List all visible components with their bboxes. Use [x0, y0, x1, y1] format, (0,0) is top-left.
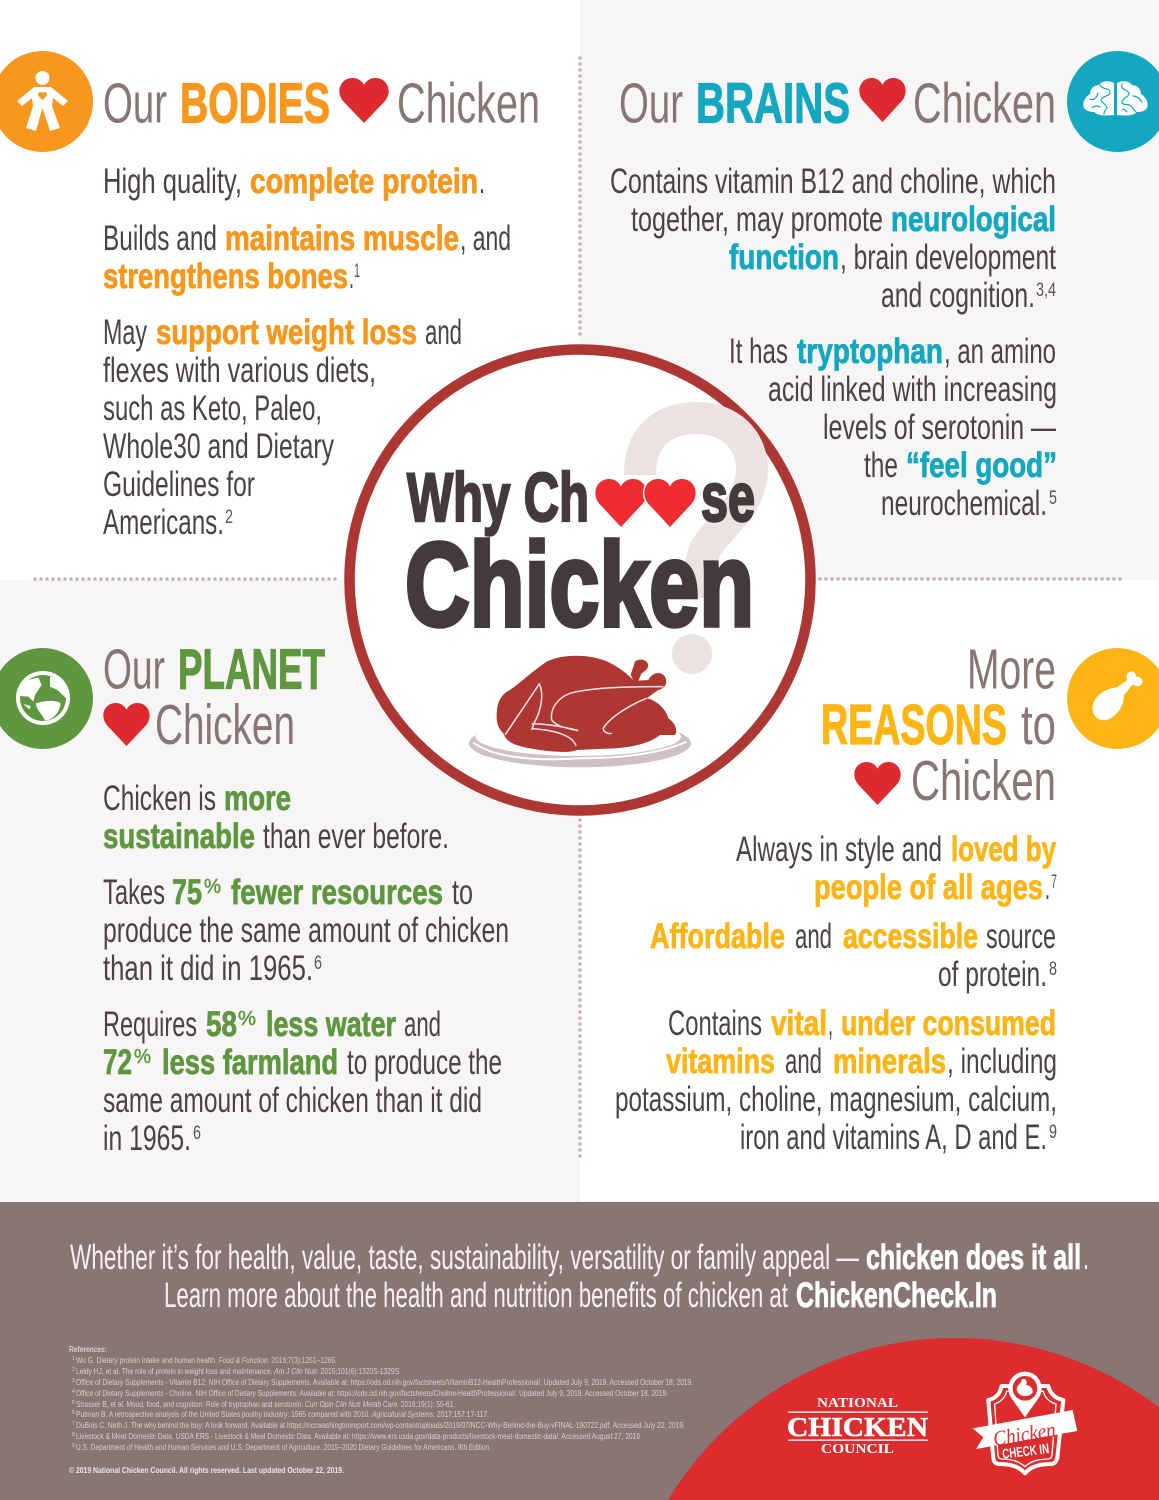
references: Livestock & Meat Domestic Data. USDA ERS - Livestock & Meat Domestic Data. Available at: https://www.ers.usda.gov/data-products/livestock-meat-domestic-data/. Accessed August 27, 2019	[76, 1432, 640, 1441]
text block: more reasons: accessible	[843, 917, 978, 956]
logo: national chicken council: NATIONAL	[817, 1396, 898, 1411]
text block: planet benefits: less water	[266, 1005, 396, 1044]
closing message: chicken does it all	[866, 1238, 1081, 1277]
copyright: © 2019 National Chicken Council. All rights reserved. Last updated October 22, 2019.	[69, 1466, 344, 1475]
heading: our planet loves chicken: Chicken	[155, 693, 295, 757]
text block: planet benefits: than ever before.	[263, 817, 449, 856]
text block: planet benefits: Requires	[103, 1005, 197, 1044]
references: Putman B. A retrospective analysis of the United States poultry industry: 1965 compared with 2010. Agricultural Systems. 2017;157:17-117.	[76, 1410, 489, 1419]
text block: brains benefits: 5	[1049, 488, 1057, 509]
references: DuBois C, Neth J. The why behind the buy: A look forward. Available at https://nccwashingtonreport.com/wp-content/uploads/2019/07/NCC-Why-Behind-the-Buy-vFINAL-190722.pdf. Accessed July 22, 2019.	[76, 1421, 685, 1430]
text block: brains benefits: the	[864, 446, 898, 485]
text block: brains benefits: neurochemical.	[881, 484, 1047, 523]
title: why choose: se	[701, 459, 755, 536]
panel: more reasons	[615, 638, 1159, 1157]
heading: our brains love chicken: Chicken	[913, 72, 1056, 136]
text block: planet benefits: 75	[172, 873, 202, 912]
logo: national chicken council: CHICKEN	[787, 1412, 929, 1442]
heading: our bodies love chicken: BODIES	[180, 72, 330, 136]
text block: planet benefits: 58	[206, 1005, 237, 1044]
text block: bodies benefits: such as Keto, Paleo,	[103, 389, 322, 428]
text block: more reasons: minerals	[833, 1042, 946, 1081]
text block: bodies benefits: Guidelines for	[103, 465, 255, 504]
references: Office of Dietary Supplements - Choline. NIH Office of Dietary Supplements. Available at: https://ods.od.nih.gov/factsheets/Choline-HealthProfessional/. Updated July 9, 2019. Accessed October 18, 2019.	[76, 1389, 668, 1398]
text block: planet benefits: 6	[314, 953, 322, 974]
text block: planet benefits: %	[238, 1008, 256, 1030]
heading: more reasons to love chicken: to	[1021, 693, 1056, 757]
references: 2	[72, 1367, 75, 1373]
references: 6	[72, 1410, 75, 1416]
logo: national chicken council	[787, 1396, 929, 1457]
text block: bodies benefits: , and	[460, 219, 511, 258]
text block: more reasons: 8	[1049, 959, 1057, 980]
heading: our bodies love chicken: Chicken	[397, 72, 540, 136]
references: 1	[72, 1356, 75, 1362]
heading: more reasons to love chicken: More	[967, 638, 1056, 702]
references: Wu G. Dietary protein intake and human health. Food & Function. 2016;7(3):1251–1265.	[76, 1356, 337, 1365]
text block: more reasons: and	[785, 1042, 822, 1081]
logo: national chicken council: COUNCIL	[821, 1442, 894, 1457]
text block: brains benefits: function	[729, 238, 839, 277]
text block: planet benefits: same amount of chicken than it did	[103, 1081, 482, 1120]
title: why choose: Why Ch	[407, 459, 589, 536]
text block: planet benefits: 6	[193, 1123, 201, 1144]
closing message	[70, 1238, 1089, 1315]
panel: our brains	[610, 51, 1159, 523]
references: 3	[72, 1378, 75, 1384]
text block: bodies benefits: Whole30 and Dietary	[103, 427, 334, 466]
text block: brains benefits: 3,4	[1036, 280, 1056, 301]
text block: planet benefits: and	[404, 1005, 441, 1044]
icon: person with heart	[0, 51, 93, 152]
center badge: why choose chicken	[350, 350, 810, 810]
text block: planet benefits: than it did in 1965.	[103, 949, 313, 988]
closing message: Learn more about the health and nutrition benefits of chicken at	[164, 1276, 788, 1315]
text block: bodies benefits: complete protein	[250, 162, 478, 201]
text block: more reasons: Always in style and	[736, 830, 942, 869]
text block: brains benefits	[610, 162, 1057, 523]
text block: planet benefits: to produce the	[347, 1043, 502, 1082]
text block: bodies benefits: flexes with various diets,	[103, 351, 376, 390]
text block: bodies benefits: support weight loss	[156, 313, 417, 352]
text block: more reasons: loved by	[951, 830, 1056, 869]
heading: our planet loves chicken	[103, 638, 325, 757]
text block: bodies benefits: High quality,	[103, 162, 242, 201]
text block: brains benefits: levels of serotonin —	[823, 408, 1056, 447]
illustration: roast chicken on plate	[469, 656, 691, 767]
text block: more reasons: Contains	[668, 1004, 762, 1043]
icon: globe	[0, 648, 93, 749]
icon: brain	[1067, 51, 1159, 152]
references: 4	[72, 1389, 75, 1395]
text block: more reasons	[615, 830, 1057, 1157]
text block: brains benefits: “feel good”	[906, 446, 1057, 485]
text block: planet benefits: %	[134, 1046, 151, 1068]
text block: brains benefits: It has	[729, 332, 788, 371]
heading: more reasons to love chicken: Chicken	[911, 749, 1056, 813]
text block: planet benefits: sustainable	[103, 817, 255, 856]
logo: chicken check in	[973, 1372, 1077, 1473]
panel: our bodies	[0, 51, 540, 542]
title: chicken: Chicken	[405, 518, 754, 652]
text block: planet benefits: 72	[103, 1043, 132, 1082]
text block: more reasons: Affordable	[650, 917, 785, 956]
text block: brains benefits: tryptophan	[797, 332, 943, 371]
text block: bodies benefits: .	[349, 257, 354, 296]
heading: our brains love chicken: BRAINS	[696, 72, 850, 136]
text block: planet benefits: %	[204, 876, 221, 898]
text block: planet benefits: in 1965.	[103, 1119, 191, 1158]
logo: chicken check in: CHECK IN	[1001, 1440, 1050, 1462]
text block: bodies benefits: 1	[354, 261, 360, 282]
text block: bodies benefits: May	[103, 313, 147, 352]
text block: more reasons: 9	[1049, 1122, 1057, 1143]
heading: our bodies love chicken: Our	[103, 72, 167, 136]
text block: planet benefits: Takes	[103, 873, 165, 912]
text block: bodies benefits: .	[479, 162, 485, 201]
text block: more reasons: .	[1045, 868, 1050, 907]
text block: more reasons: vital	[771, 1004, 827, 1043]
text block: planet benefits	[103, 779, 509, 1158]
references: 9	[72, 1443, 75, 1449]
text block: bodies benefits: maintains muscle	[225, 219, 459, 258]
text block: planet benefits: fewer resources	[231, 873, 443, 912]
panel: our planet	[0, 638, 509, 1158]
references: 5	[72, 1400, 75, 1406]
heading: more reasons to love chicken	[821, 638, 1056, 813]
heading: more reasons to love chicken: REASONS	[821, 693, 1007, 757]
text block: planet benefits: more	[224, 779, 291, 818]
references: Office of Dietary Supplements - Vitamin B12. NIH Office of Dietary Supplements. Available at: https://ods.od.nih.gov/factsheets/VitaminB12-HealthProfessional/. Updated July 9, 2019. Accessed October 18, 2019.	[76, 1378, 693, 1387]
text block: more reasons: vitamins	[666, 1042, 775, 1081]
icon: drumstick	[1067, 648, 1159, 749]
text block: brains benefits: together, may promote	[631, 200, 883, 239]
text block: bodies benefits: and	[425, 313, 462, 352]
references: U.S. Department of Health and Human Services and U.S. Department of Agriculture. 2015–2020 Dietary Guidelines for Americans. 8th Edition.	[76, 1443, 491, 1452]
text block: more reasons: under consumed	[841, 1004, 1056, 1043]
closing message: .	[1083, 1238, 1089, 1277]
text block: brains benefits: , an amino	[944, 332, 1056, 371]
references: Leidy HJ, et al. The role of protein in weight loss and maintenance. Am J Clin Nutr. 2015;101(6):1320S-1329S.	[76, 1367, 401, 1376]
logo: chicken check in: Chicken	[991, 1417, 1057, 1451]
heading: our planet loves chicken: PLANET	[178, 638, 325, 702]
text block: more reasons: ,	[828, 1004, 833, 1043]
text block: bodies benefits: 2	[225, 507, 233, 528]
text block: more reasons: 7	[1051, 872, 1057, 893]
text block: planet benefits: produce the same amount of chicken	[103, 911, 509, 950]
references	[69, 1345, 693, 1452]
heading: our brains love chicken: Our	[619, 72, 683, 136]
text block: more reasons: , including	[947, 1042, 1057, 1081]
footer band	[0, 1202, 1159, 1500]
references: 7	[72, 1421, 75, 1427]
text block: more reasons: of protein.	[938, 955, 1047, 994]
text block: planet benefits: Chicken is	[103, 779, 216, 818]
heading: our brains love chicken	[619, 72, 1056, 136]
red corner shape	[668, 1338, 1159, 1500]
text block: planet benefits: to	[452, 873, 473, 912]
references: References:	[69, 1345, 107, 1354]
references: Strasser B, et al. Mood, food, and cognition: Role of tryptophan and serotonin. Curr Opin Clin Nutr Metab Care. 2016;19(1): 55-61.	[76, 1400, 455, 1409]
text block: bodies benefits	[103, 162, 511, 542]
text block: bodies benefits: strengthens bones	[103, 257, 348, 296]
text block: more reasons: and	[795, 917, 832, 956]
heading: our planet loves chicken: Our	[103, 638, 165, 702]
references: 8	[72, 1432, 75, 1438]
text block: planet benefits: less farmland	[162, 1043, 338, 1082]
text block: brains benefits: , brain development	[840, 238, 1056, 277]
text block: brains benefits: and cognition.	[881, 276, 1035, 315]
text block: more reasons: source	[986, 917, 1056, 956]
text block: bodies benefits: Americans.	[103, 503, 224, 542]
text block: more reasons: people of all ages	[814, 868, 1043, 907]
closing message: ChickenCheck.In	[796, 1276, 997, 1315]
icon: large question mark	[640, 418, 752, 674]
text block: bodies benefits: Builds and	[103, 219, 217, 258]
text block: brains benefits: neurological	[891, 200, 1056, 239]
heading: our bodies love chicken	[103, 72, 540, 136]
